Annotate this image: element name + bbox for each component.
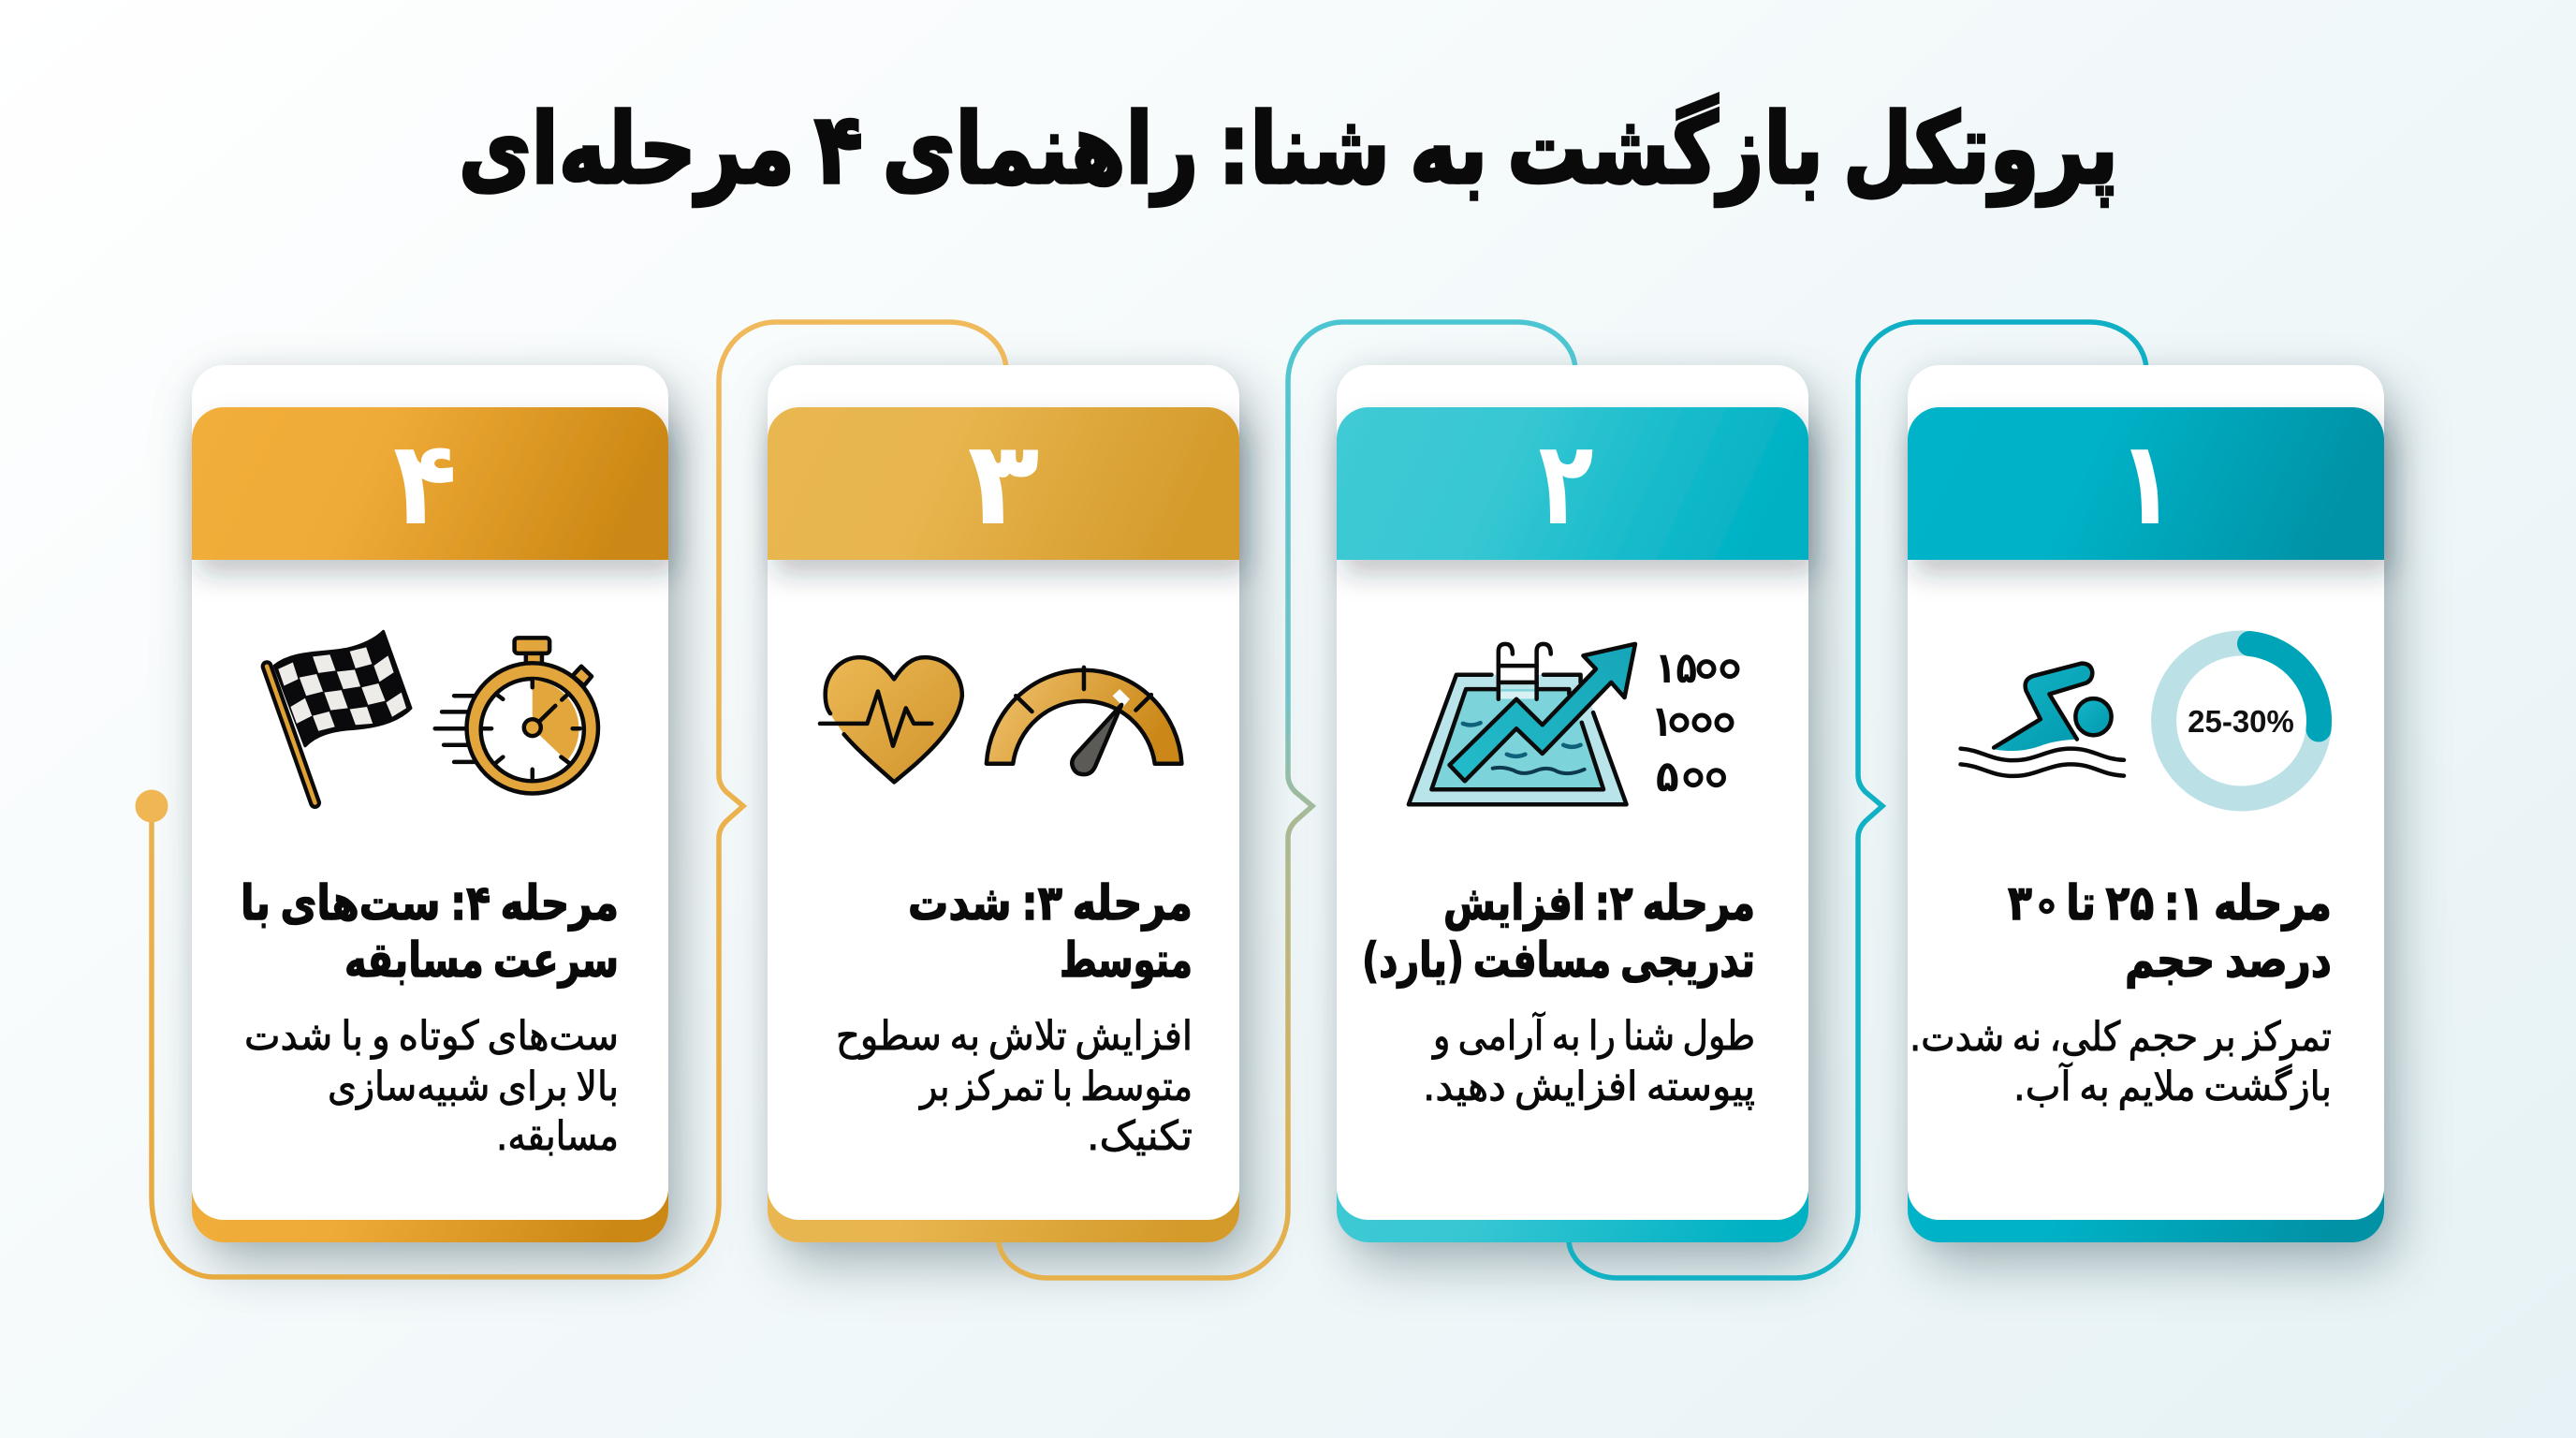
header band [768, 407, 1239, 560]
icon: pool with rising arrow [1409, 644, 1635, 804]
yardage labels: ۵۰۰ [1656, 751, 1725, 801]
heading: سرعت مسابقه [344, 933, 619, 989]
header band [192, 407, 668, 560]
icon: intensity gauge [987, 668, 1181, 774]
yardage labels: ۱۰۰۰ [1651, 696, 1735, 746]
card base [768, 1105, 1239, 1242]
body text [244, 1013, 619, 1160]
chart: 25-30% donut: 25-30% [2188, 704, 2294, 739]
body text: مسابقه. [496, 1113, 619, 1160]
heading [908, 876, 1193, 989]
card base [192, 1105, 668, 1242]
panel: stage 4 [192, 365, 668, 1242]
connector start dot [135, 790, 168, 822]
heading: تدریجی مسافت (یارد) [1362, 933, 1755, 989]
connector: stage 3 to stage 4 [152, 322, 1006, 1277]
card face [1908, 365, 2384, 1220]
yardage labels: ۱۵۰۰ [1655, 642, 1739, 693]
panel: stage 1 [1908, 365, 2384, 1242]
heading: درصد حجم [2125, 933, 2332, 989]
step number: ۲ [1539, 417, 1593, 551]
heading: مرحله ۱: ۲۵ تا ۳۰ [2008, 876, 2332, 932]
card base [1337, 1105, 1808, 1242]
body text: ست‌های کوتاه و با شدت [244, 1013, 619, 1060]
title: پروتکل بازگشت به شنا: راهنمای ۴ مرحله‌ای [459, 92, 2118, 207]
connector: stage 2 to stage 3 [999, 322, 1575, 1278]
icon: stopwatch [435, 638, 598, 793]
body text [836, 1013, 1193, 1160]
header band [1908, 407, 2384, 560]
card face [192, 365, 668, 1220]
heading [241, 876, 619, 989]
body text: طول شنا را به آرامی و [1431, 1011, 1755, 1060]
card base [1908, 1105, 2384, 1242]
body text: تمرکز بر حجم کلی، نه شدت. [1910, 1014, 2332, 1061]
body text: بازگشت ملایم به آب. [2013, 1062, 2332, 1110]
header band [1337, 407, 1808, 560]
body text: تکنیک. [1087, 1113, 1193, 1160]
heading [2008, 876, 2332, 989]
step number: ۱ [2117, 417, 2175, 551]
body text: افزایش تلاش به سطوح [836, 1013, 1193, 1060]
body text: متوسط با تمرکز بر [918, 1064, 1193, 1110]
card face [1337, 365, 1808, 1220]
connector: stage 1 to stage 2 [1569, 322, 2146, 1278]
heading: مرحله ۳: شدت [908, 876, 1193, 932]
body text [1910, 1014, 2332, 1110]
heading [1362, 876, 1755, 989]
chart: 25-30% donut [2164, 643, 2320, 799]
heading: مرحله ۲: افزایش [1443, 876, 1755, 932]
body text [1423, 1011, 1755, 1110]
yardage labels [1651, 642, 1739, 801]
heading: مرحله ۴: ست‌های با [241, 876, 619, 932]
icon: swimmer [1961, 664, 2124, 776]
body text: پیوسته افزایش دهید. [1423, 1064, 1755, 1110]
step number: ۴ [393, 417, 457, 551]
panel: stage 2 [1337, 365, 1808, 1242]
step number: ۳ [968, 417, 1039, 551]
icon: checkered flag [267, 631, 411, 802]
body text: بالا برای شبیه‌سازی [328, 1064, 619, 1110]
card face [768, 365, 1239, 1220]
heading: متوسط [1060, 933, 1193, 989]
icon: heart rate [820, 657, 962, 782]
panel: stage 3 [768, 365, 1239, 1242]
